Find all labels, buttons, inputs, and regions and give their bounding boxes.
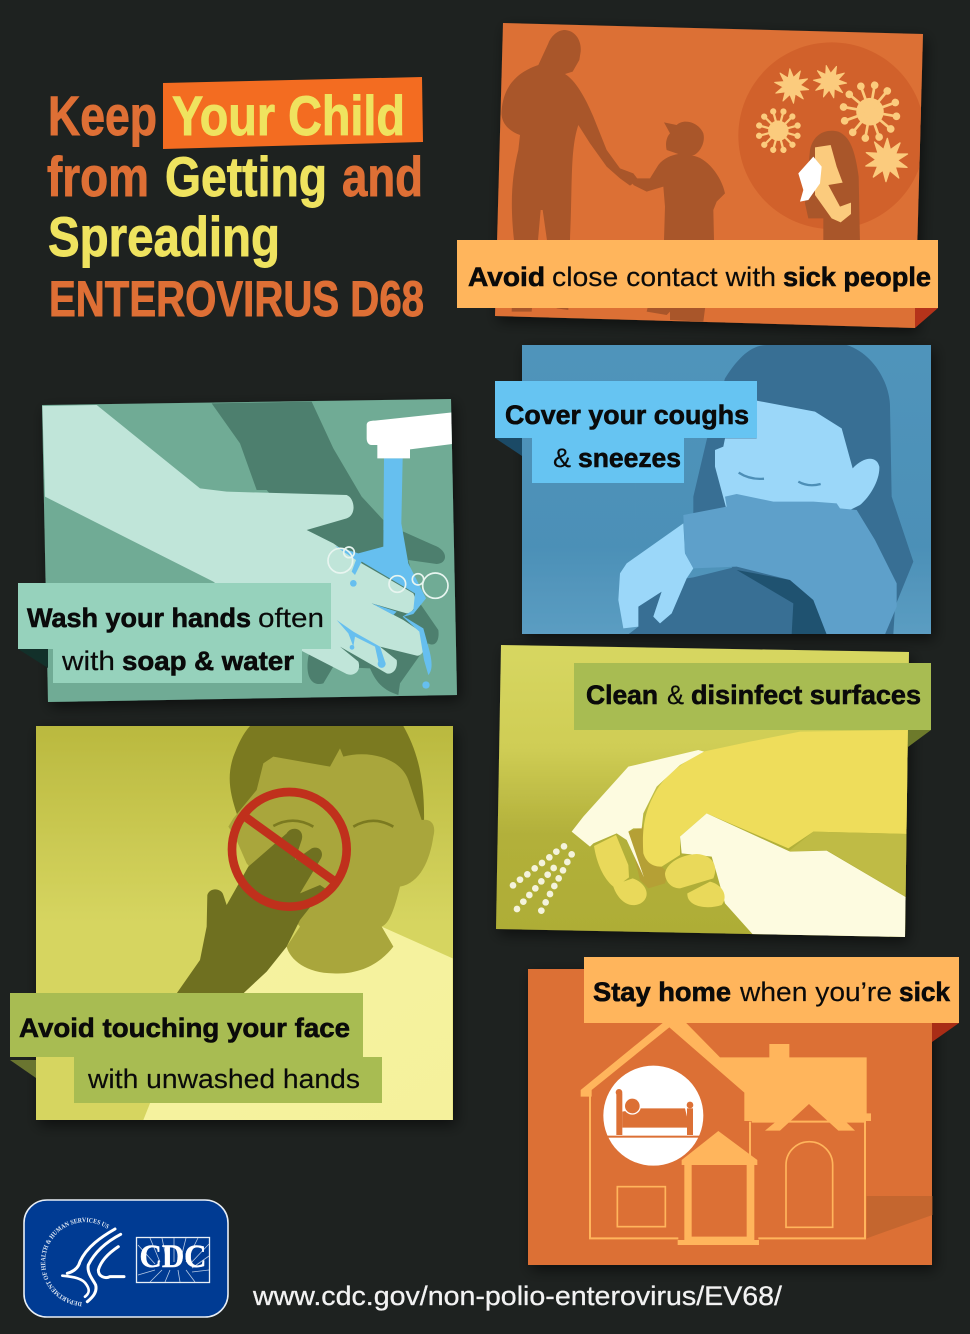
- HHS eagle: [62, 1229, 124, 1302]
- sick-person circle: [738, 42, 925, 229]
- shadow behind fingers: [628, 827, 668, 888]
- label: cover coughs: Cover your coughs: [505, 400, 749, 430]
- spray droplets: [510, 843, 575, 914]
- sleeve: [680, 813, 908, 938]
- panel: wash hands: [18, 399, 457, 702]
- label: avoid close contact: [457, 240, 938, 308]
- fingers: [594, 835, 725, 907]
- panel: avoid close contact: [457, 23, 938, 328]
- face: [715, 401, 879, 510]
- panel: avoid touching face: [10, 726, 453, 1120]
- hand touching face: [177, 829, 325, 993]
- spray bottle nozzle: [572, 750, 704, 877]
- label: wash hands: soap & water: [122, 646, 294, 676]
- title: [47, 77, 424, 327]
- sleeve: [683, 494, 897, 634]
- viruses: [756, 65, 908, 182]
- title: from: [47, 145, 149, 208]
- label: avoid touching face: [10, 993, 382, 1103]
- front arm and hand: [42, 405, 425, 675]
- panel: clean surfaces: [496, 645, 931, 938]
- title: Your Child: [172, 84, 405, 147]
- title: and: [342, 145, 423, 208]
- label: clean surfaces: Clean: [586, 680, 658, 710]
- label: cover coughs: &: [553, 443, 571, 473]
- shirt: [143, 927, 453, 1120]
- label: avoid close contact: sick people: [783, 262, 931, 292]
- eyebrows: [273, 821, 393, 827]
- hair: [693, 345, 913, 634]
- CDC mark: CDC: [140, 1239, 206, 1275]
- label: clean surfaces: disinfect surfaces: [691, 680, 921, 710]
- title: Keep: [48, 84, 157, 147]
- label: avoid close contact: close contact with: [552, 262, 776, 292]
- label: avoid close contact: Avoid: [468, 262, 545, 292]
- logo: HHS and CDC: [23, 1199, 229, 1318]
- house shadow: [867, 1196, 932, 1238]
- title: Spreading: [48, 205, 280, 268]
- label: cover coughs: sneezes: [578, 443, 681, 473]
- no symbol: [232, 792, 347, 907]
- back hand: [212, 402, 445, 695]
- label: clean surfaces: &: [667, 680, 684, 710]
- label: stay home: [584, 957, 959, 1023]
- faucet: [367, 412, 452, 458]
- label: stay home: sick: [899, 977, 951, 1007]
- panel: stay home: [528, 957, 959, 1265]
- HHS seal text: DEPARTMENT OF HEALTH & HUMAN SERVICES USA: [40, 1218, 110, 1306]
- hair: [230, 726, 424, 820]
- bed icon: [603, 1066, 703, 1166]
- hand: [643, 730, 908, 867]
- label: wash hands: often: [258, 603, 324, 633]
- house: [581, 1018, 871, 1238]
- body: [629, 568, 780, 634]
- closed eyes: [739, 473, 821, 485]
- HHS seal text: [40, 1218, 110, 1306]
- label: wash hands: with: [61, 646, 115, 676]
- label: stay home: Stay home: [593, 977, 731, 1007]
- soap bubbles: [328, 547, 448, 598]
- label: avoid touching face: with unwashed hands: [87, 1064, 360, 1094]
- website url: www.cdc.gov/non-polio-enterovirus/EV68/: [252, 1281, 783, 1311]
- label: clean surfaces: [574, 663, 931, 730]
- label: wash hands: [18, 583, 331, 683]
- head: [228, 748, 434, 973]
- label: cover coughs: [495, 381, 757, 483]
- title: ENTEROVIRUS D68: [49, 271, 424, 327]
- water stream: [335, 458, 432, 689]
- label: avoid touching face: Avoid touching your face: [19, 1013, 350, 1043]
- label: wash hands: Wash your hands: [27, 603, 251, 633]
- panel: cover coughs: [495, 345, 931, 634]
- forearm: [618, 523, 693, 628]
- porch: [678, 1131, 759, 1245]
- label: stay home: when you’re: [739, 977, 892, 1007]
- adult and child silhouettes: [501, 30, 725, 322]
- sick child sneezing: [798, 131, 860, 243]
- sleeve shadow: [788, 832, 908, 898]
- title: Getting: [165, 145, 327, 208]
